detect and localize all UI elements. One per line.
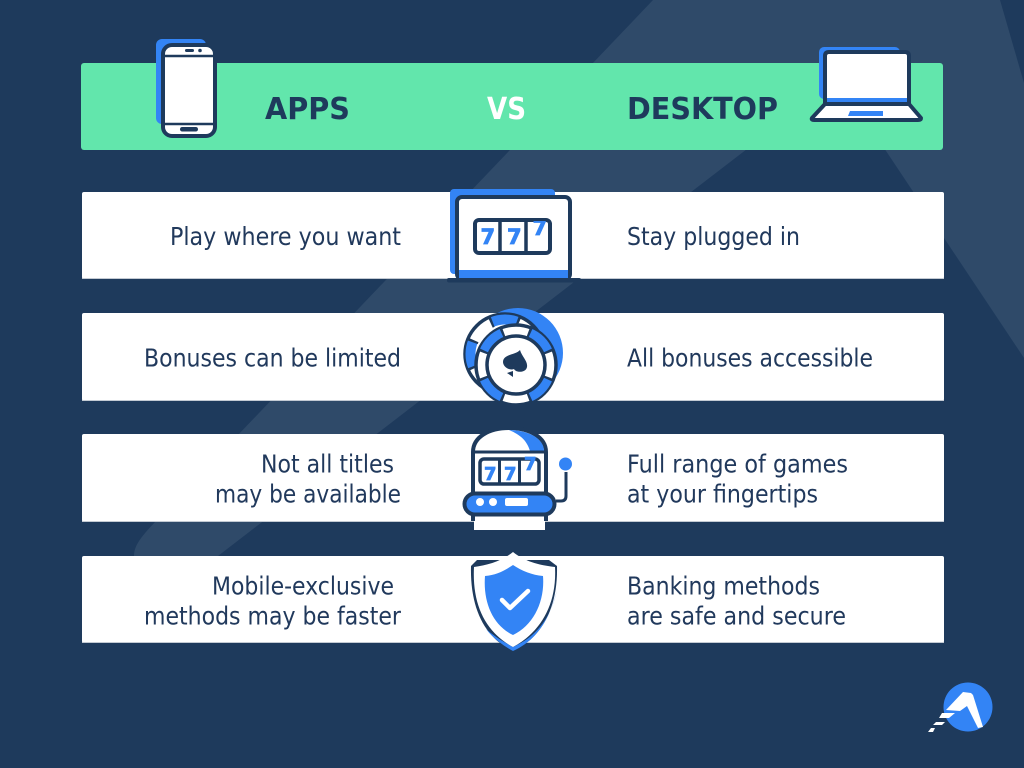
icon: laptop with 777 reels: 7 <box>532 216 547 240</box>
icon: slot machine <box>464 428 572 530</box>
icon: laptop with 777 reels: 7 <box>480 225 495 249</box>
icon: laptop with 777 reels: 7 <box>507 225 522 249</box>
heading: apps: APPS <box>265 92 350 127</box>
panel: row 1 <box>82 192 944 279</box>
panel: row 3 <box>82 434 944 522</box>
text: apps row 2: Bonuses can be limited <box>144 344 401 372</box>
icon: slot machine: 7 <box>524 454 537 475</box>
text: desktop row 2: All bonuses accessible <box>627 344 873 372</box>
text: desktop row 4: are safe and secure <box>627 602 846 630</box>
icon: poker chip <box>465 308 563 405</box>
heading: vs: VS <box>487 92 526 127</box>
text: desktop row 3: Full range of games <box>627 450 848 478</box>
text: apps row 4: Mobile-exclusive <box>212 572 394 600</box>
icon: laptop <box>812 47 921 120</box>
icon: shield with check <box>471 552 557 651</box>
icon: smartphone <box>156 39 215 136</box>
icon: slot machine: 7 <box>504 464 517 485</box>
text: apps row 1: Play where you want <box>170 222 401 251</box>
text: apps row 3: Not all titles <box>261 450 394 478</box>
heading: desktop: DESKTOP <box>627 92 778 127</box>
icon: brand logo <box>928 682 992 732</box>
text: desktop row 3: at your fingertips <box>627 480 818 508</box>
text: apps row 4 <box>144 572 402 630</box>
panel: header banner <box>81 63 943 150</box>
icon: laptop with 777 reels <box>447 189 581 282</box>
text: desktop row 4 <box>627 572 846 630</box>
text: apps row 3 <box>215 450 401 508</box>
text: desktop row 3 <box>627 450 848 508</box>
text: apps row 3: may be available <box>215 480 401 508</box>
text: desktop row 4: Banking methods <box>627 572 820 600</box>
panel: row 2 <box>82 313 944 401</box>
text: apps row 4: methods may be faster <box>144 602 402 630</box>
text: desktop row 1: Stay plugged in <box>627 222 800 251</box>
panel: row 4 <box>82 556 944 643</box>
icon: slot machine: 7 <box>484 464 497 485</box>
